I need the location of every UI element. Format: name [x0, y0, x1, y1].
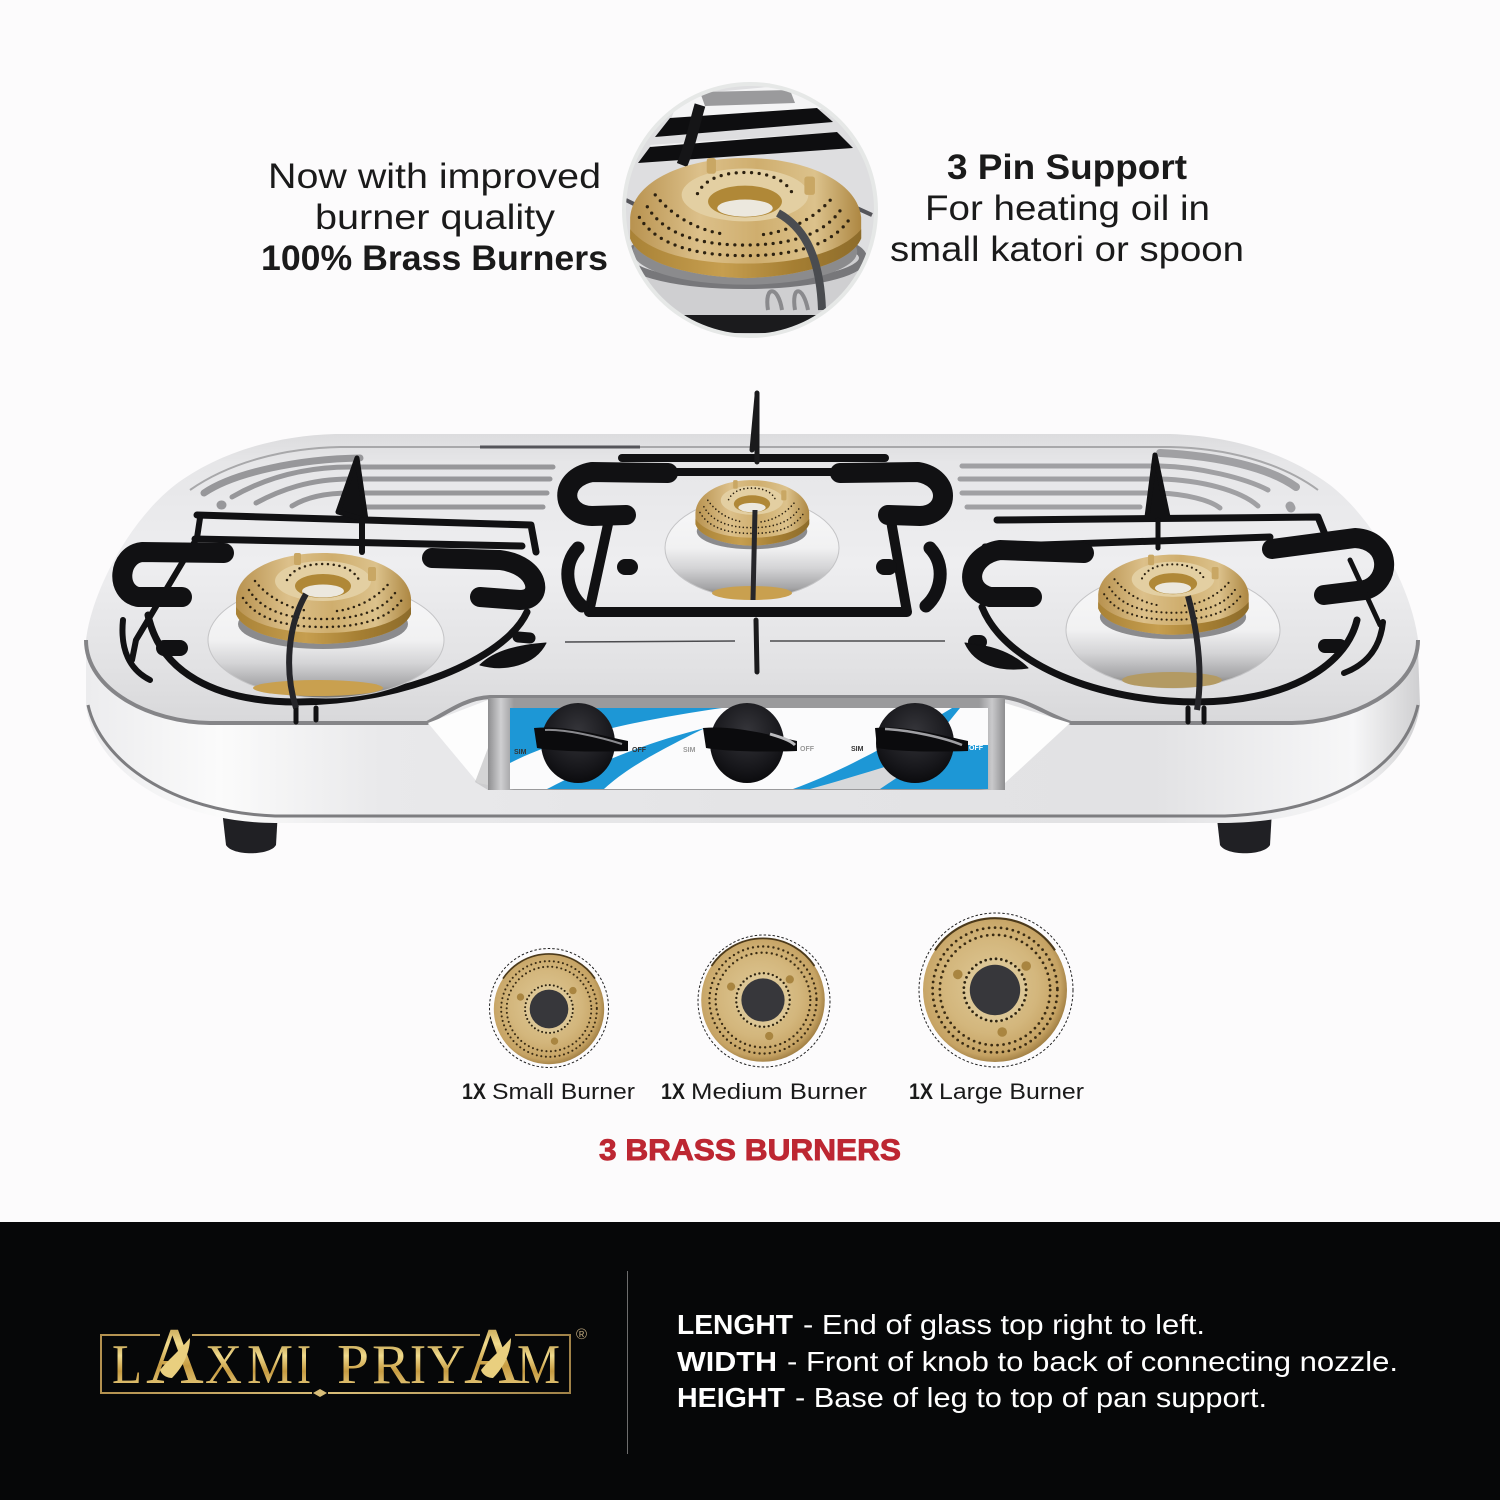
panel labels: OFF — [632, 747, 647, 754]
callout: 3 pin support — [890, 148, 1244, 269]
right burner — [1066, 555, 1280, 710]
dimension notes — [677, 1309, 1398, 1413]
left pan support — [122, 458, 546, 722]
stove body — [86, 650, 1420, 823]
heading: 3 brass burners: 3 BRASS BURNERS — [599, 1134, 901, 1167]
burner: small — [490, 948, 608, 1068]
logo wordmark: M — [517, 1334, 560, 1396]
callout: brass burners: 100% Brass Burners — [261, 239, 608, 278]
callout: brass burners: Now with improved — [268, 157, 601, 196]
logo: ® — [576, 1326, 587, 1343]
dimension notes: WIDTH — [677, 1346, 777, 1377]
panel labels: SIM — [683, 747, 696, 754]
logo wordmark: I — [410, 1334, 426, 1396]
logo wordmark: Y — [427, 1334, 465, 1396]
left burner — [208, 553, 444, 708]
panel labels: SIM — [851, 746, 864, 753]
dimension notes: - End of glass top right to left. — [803, 1309, 1205, 1340]
logo wordmark: A — [146, 1313, 204, 1401]
callout: 3 pin support: 3 Pin Support — [947, 148, 1187, 187]
left grooves — [204, 458, 553, 507]
middle burner — [665, 480, 839, 600]
knob 1 — [534, 703, 628, 783]
burner: large — [919, 913, 1073, 1067]
top plate — [86, 434, 1418, 723]
panel labels: SIM — [514, 749, 527, 756]
footer panel — [0, 1222, 1500, 1500]
callout: brass burners: burner quality — [315, 198, 556, 237]
logo wordmark: L — [112, 1334, 142, 1396]
knob 3 — [875, 703, 968, 783]
circular burner close-up — [620, 80, 880, 340]
burner labels: Large Burner — [939, 1079, 1084, 1104]
panel labels: OFF — [800, 746, 815, 753]
panel labels: OFF — [969, 745, 984, 752]
plate rim highlight — [86, 640, 1418, 723]
middle pan support — [567, 458, 943, 612]
knob 2 — [703, 703, 797, 783]
burner labels: 1X — [462, 1079, 486, 1104]
logo flames — [160, 1338, 511, 1378]
burner labels: Small Burner — [492, 1079, 635, 1104]
panel labels — [514, 745, 984, 756]
dimension notes: LENGHT — [677, 1309, 793, 1340]
plate center crease — [565, 641, 945, 642]
logo wordmark: R — [372, 1334, 411, 1396]
burner labels: Medium Burner — [691, 1079, 867, 1104]
dimension notes: - Base of leg to top of pan support. — [795, 1382, 1267, 1413]
right grooves — [960, 453, 1296, 508]
body lower rim line — [88, 705, 1418, 816]
logo wordmark: P — [337, 1334, 369, 1396]
plate inner top edge — [190, 447, 1318, 490]
burner: medium — [698, 935, 830, 1067]
dimension notes: HEIGHT — [677, 1382, 785, 1413]
logo wordmark — [112, 1313, 560, 1401]
callout: 3 pin support: small katori or spoon — [890, 230, 1244, 269]
center pin spikes — [752, 393, 757, 672]
burner labels: 1X — [661, 1079, 685, 1104]
control panel — [488, 698, 1005, 790]
logo — [101, 1313, 587, 1401]
mirrored wedges — [428, 700, 1070, 790]
logo wordmark: M — [247, 1334, 293, 1396]
logo wordmark: I — [297, 1334, 311, 1396]
dimension notes: - Front of knob to back of connecting nozzle. — [787, 1346, 1398, 1377]
logo wordmark: A — [464, 1313, 522, 1401]
logo wordmark: X — [205, 1334, 242, 1396]
burner labels: 1X — [909, 1079, 933, 1104]
burner labels — [462, 1079, 1084, 1104]
callout: brass burners — [261, 157, 608, 278]
right pan support — [965, 455, 1384, 722]
stove illustration — [86, 393, 1420, 853]
callout: 3 pin support: For heating oil in — [925, 189, 1210, 228]
stove feet — [222, 810, 1272, 853]
